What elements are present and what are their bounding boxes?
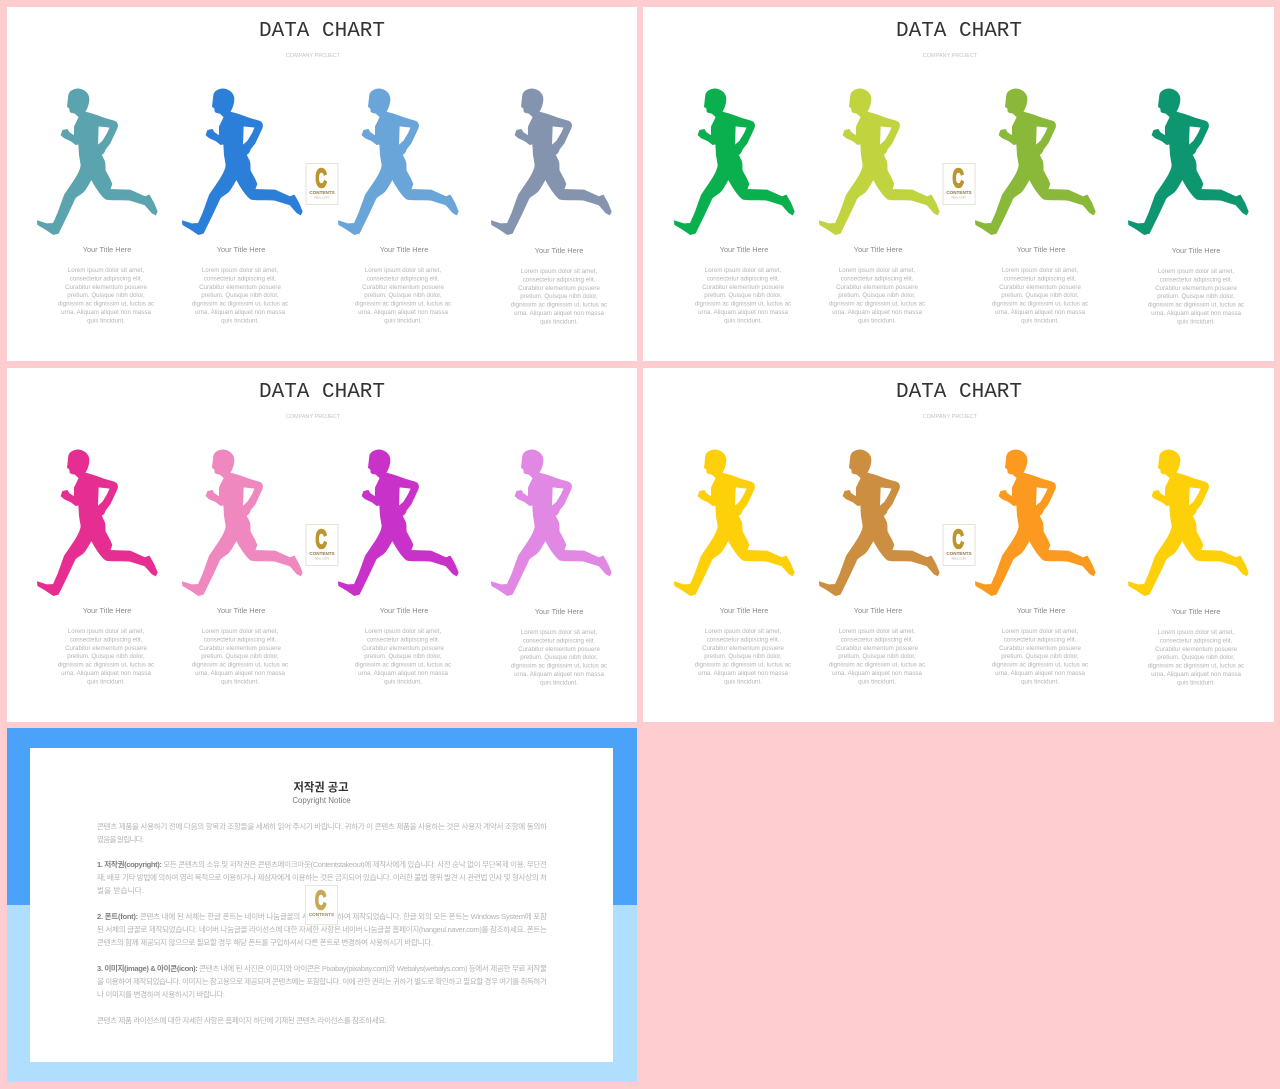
logo: REAL COPY: [952, 556, 967, 560]
column text 4: quis tincidunt.: [1177, 318, 1215, 325]
column text 4: pretium. Quisque nibh dolor,: [1157, 654, 1235, 661]
column text 4: urna. Aliquam aliquet non massa: [514, 310, 604, 317]
logo: REAL COPY: [315, 556, 330, 560]
column text 2: pretium. Quisque nibh dolor,: [201, 653, 279, 660]
column text 3: consectetur adipiscing elit.: [1004, 275, 1077, 282]
column text 1: consectetur adipiscing elit.: [707, 636, 780, 643]
column text 4: pretium. Quisque nibh dolor,: [520, 654, 598, 661]
column text 4: dignissim ac dignissim ut, luctus ac: [511, 302, 607, 309]
column text 2: dignissim ac dignissim ut, luctus ac: [829, 662, 925, 669]
column text 4: consectetur adipiscing elit.: [1160, 276, 1233, 283]
column text 3: Lorem ipsum dolor sit amet,: [365, 628, 441, 635]
column text 3: dignissim ac dignissim ut, luctus ac: [992, 301, 1088, 308]
column text 1: pretium. Quisque nibh dolor,: [704, 292, 782, 299]
logo: CONTENTS: [309, 190, 335, 195]
logo: [943, 524, 975, 566]
icon: runner 1: [37, 450, 157, 596]
logo: [306, 524, 338, 566]
logo: C: [316, 525, 327, 554]
notice heading: 저작권 공고: [293, 780, 349, 794]
column text 3: consectetur adipiscing elit.: [1004, 636, 1077, 643]
icon: runner 2: [819, 89, 939, 235]
icon: runner 2: [182, 450, 302, 596]
column text 1: Curabitur elementum posuere: [65, 284, 147, 291]
column text 1: pretium. Quisque nibh dolor,: [67, 653, 145, 660]
column text 4: consectetur adipiscing elit.: [1160, 637, 1233, 644]
title: DATA CHART: [259, 381, 385, 404]
column text 1: urna. Aliquam aliquet non massa: [61, 670, 151, 677]
column text 3: Lorem ipsum dolor sit amet,: [1002, 267, 1078, 274]
notice section 3: image and icon: 을 이용하여 제작되었습니다. 이미지는 참고용으로 제공되며 콘텐츠에는 포함합니다. 이에 관한 권리는 귀하가 별도로 확인하고 필요할 경우 여기를 취득하거: [97, 976, 547, 986]
column title 1: Your Title Here: [720, 606, 768, 615]
title: DATA CHART: [896, 381, 1022, 404]
column text 2: dignissim ac dignissim ut, luctus ac: [192, 301, 288, 308]
column title 3: Your Title Here: [380, 606, 428, 615]
column text 1: quis tincidunt.: [87, 317, 125, 324]
column text 3: urna. Aliquam aliquet non massa: [358, 670, 448, 677]
column text 4: consectetur adipiscing elit.: [523, 637, 596, 644]
panel: green data chart: [643, 7, 1274, 361]
column text 1: consectetur adipiscing elit.: [70, 636, 143, 643]
column title 3: Your Title Here: [1017, 245, 1065, 254]
column text 2: urna. Aliquam aliquet non massa: [195, 670, 285, 677]
icon: runner 3: [338, 89, 458, 235]
column text 3: consectetur adipiscing elit.: [367, 275, 440, 282]
logo: C: [952, 525, 964, 554]
notice section 1: copyright: [97, 859, 547, 895]
subtitle: COMPANY PROJECT: [286, 414, 341, 420]
column text 4: pretium. Quisque nibh dolor,: [520, 293, 598, 300]
logo: C: [315, 886, 326, 915]
column text 4: Lorem ipsum dolor sit amet,: [521, 268, 597, 275]
column text 2: consectetur adipiscing elit.: [841, 275, 914, 282]
column text 2: pretium. Quisque nibh dolor,: [201, 292, 279, 299]
panel: teal and blue data chart: [7, 7, 637, 361]
column text 3: quis tincidunt.: [384, 678, 422, 685]
notice section 1: copyright: 벌을 받습니다.: [97, 885, 144, 895]
subtitle: COMPANY PROJECT: [923, 53, 978, 59]
column text 2: Lorem ipsum dolor sit amet,: [839, 628, 915, 635]
column title 3: Your Title Here: [1017, 606, 1065, 615]
notice section 2: font: 2. 폰트(font): 콘텐츠 내에 된 서체는 한글 폰트는 네이버 나눔글꼴의 서체를 사용하여 제작되었습니다. 한글 외의 모든 폰트는 Windows System에 포함: [97, 911, 547, 921]
notice subheading: Copyright Notice: [292, 796, 351, 805]
logo: C: [952, 164, 964, 193]
panel: pink data chart: [7, 368, 637, 722]
column text 3: urna. Aliquam aliquet non massa: [995, 309, 1085, 316]
logo: C: [316, 164, 327, 193]
notice section 3: image and icon: 나 이미지를 변경하여 사용하시기 바랍니다.: [97, 989, 225, 999]
notice section 2: font: 된 서체의 글꼴로 제작되었습니다. 네이버 나눔글꼴 라이선스에 대한 자세한 사항은 네이버 나눔글꼴 홈페이지(hangeul.naver.com)를 참조하세요. 폰트는: [97, 924, 547, 934]
logo: [306, 164, 338, 204]
column text 3: Curabitur elementum posuere: [362, 645, 444, 652]
notice intro text: 콘텐츠 제품을 사용하기 전에 다음의 항목과 조항들을 세세히 읽어 주시기 바랍니다. 귀하가 이 콘텐츠 제품을 사용하는 것은 사용자 계약서 조항에 동의하: [97, 821, 547, 831]
column text 3: dignissim ac dignissim ut, luctus ac: [992, 662, 1088, 669]
column text 4: Curabitur elementum posuere: [518, 646, 600, 653]
column text 4: consectetur adipiscing elit.: [523, 276, 596, 283]
column text 3: pretium. Quisque nibh dolor,: [1001, 653, 1079, 660]
column text 4: pretium. Quisque nibh dolor,: [1157, 293, 1235, 300]
column text 3: urna. Aliquam aliquet non massa: [358, 309, 448, 316]
icon: runner 1: [37, 89, 157, 235]
column text 4: Lorem ipsum dolor sit amet,: [1158, 629, 1234, 636]
logo: [943, 164, 975, 204]
icon: runner 1: [674, 89, 794, 235]
column text 1: Lorem ipsum dolor sit amet,: [68, 267, 144, 274]
column title 2: Your Title Here: [217, 245, 265, 254]
column text 1: pretium. Quisque nibh dolor,: [67, 292, 145, 299]
column text 2: quis tincidunt.: [858, 678, 896, 685]
column text 1: urna. Aliquam aliquet non massa: [698, 309, 788, 316]
column text 4: Lorem ipsum dolor sit amet,: [1158, 268, 1234, 275]
column text 3: pretium. Quisque nibh dolor,: [364, 292, 442, 299]
column text 4: urna. Aliquam aliquet non massa: [514, 671, 604, 678]
column text 1: Lorem ipsum dolor sit amet,: [68, 628, 144, 635]
column text 3: Curabitur elementum posuere: [999, 284, 1081, 291]
column text 1: urna. Aliquam aliquet non massa: [698, 670, 788, 677]
column title 1: Your Title Here: [83, 245, 131, 254]
column text 3: quis tincidunt.: [1021, 317, 1059, 324]
column text 1: consectetur adipiscing elit.: [70, 275, 143, 282]
column text 3: Lorem ipsum dolor sit amet,: [1002, 628, 1078, 635]
column text 3: urna. Aliquam aliquet non massa: [995, 670, 1085, 677]
icon: runner 4: [491, 89, 611, 235]
column text 1: urna. Aliquam aliquet non massa: [61, 309, 151, 316]
icon: runner 2: [182, 89, 302, 235]
column text 2: Curabitur elementum posuere: [836, 645, 918, 652]
column text 2: urna. Aliquam aliquet non massa: [832, 309, 922, 316]
column text 2: Curabitur elementum posuere: [199, 645, 281, 652]
column text 3: Lorem ipsum dolor sit amet,: [365, 267, 441, 274]
icon: runner 4: [1128, 89, 1248, 235]
column text 2: urna. Aliquam aliquet non massa: [832, 670, 922, 677]
column text 3: pretium. Quisque nibh dolor,: [1001, 292, 1079, 299]
column text 1: dignissim ac dignissim ut, luctus ac: [58, 301, 154, 308]
icon: runner 1: [674, 450, 794, 596]
logo: CONTENTS: [946, 190, 972, 195]
notice closing text: 콘텐츠 제품 라이선스에 대한 자세한 사항은 홈페이지 하단에 기재된 콘텐츠 라이선스를 참조하세요.: [97, 1015, 387, 1025]
notice section 1: copyright: 재, 배포 기타 방법에 의하여 영리 목적으로 이용하거나 제삼자에게 이용하는 것은 금지되어 있습니다. 이러한 불법 행위 발견 시 관련법 민사 및 형사상의 처: [97, 872, 547, 882]
title: DATA CHART: [259, 20, 385, 43]
notice section 2: font: [97, 911, 547, 947]
column title 3: Your Title Here: [380, 245, 428, 254]
column text 2: consectetur adipiscing elit.: [841, 636, 914, 643]
logo: REAL COPY: [315, 196, 330, 200]
icon: runner 3: [975, 89, 1095, 235]
column text 3: Curabitur elementum posuere: [999, 645, 1081, 652]
column text 3: Curabitur elementum posuere: [362, 284, 444, 291]
column text 4: urna. Aliquam aliquet non massa: [1151, 310, 1241, 317]
column text 2: urna. Aliquam aliquet non massa: [195, 309, 285, 316]
column title 4: Your Title Here: [535, 607, 583, 616]
column text 1: quis tincidunt.: [87, 678, 125, 685]
column text 4: quis tincidunt.: [1177, 679, 1215, 686]
column text 2: dignissim ac dignissim ut, luctus ac: [192, 662, 288, 669]
column text 4: urna. Aliquam aliquet non massa: [1151, 671, 1241, 678]
column text 2: quis tincidunt.: [858, 317, 896, 324]
column text 4: quis tincidunt.: [540, 318, 578, 325]
column text 3: consectetur adipiscing elit.: [367, 636, 440, 643]
column text 2: pretium. Quisque nibh dolor,: [838, 653, 916, 660]
subtitle: COMPANY PROJECT: [286, 53, 341, 59]
notice section 3: image and icon: [97, 963, 547, 999]
icon: runner 4: [1128, 450, 1248, 596]
title: DATA CHART: [896, 20, 1022, 43]
column text 3: quis tincidunt.: [1021, 678, 1059, 685]
column text 4: dignissim ac dignissim ut, luctus ac: [511, 663, 607, 670]
column text 4: Curabitur elementum posuere: [1155, 646, 1237, 653]
column title 4: Your Title Here: [535, 246, 583, 255]
column text 2: pretium. Quisque nibh dolor,: [838, 292, 916, 299]
column text 2: dignissim ac dignissim ut, luctus ac: [829, 301, 925, 308]
column text 3: dignissim ac dignissim ut, luctus ac: [355, 301, 451, 308]
column title 1: Your Title Here: [83, 606, 131, 615]
panel: copyright notice: [7, 728, 637, 1082]
column text 1: quis tincidunt.: [724, 317, 762, 324]
column text 2: Curabitur elementum posuere: [836, 284, 918, 291]
logo: CONTENTS: [309, 912, 334, 917]
column text 2: Lorem ipsum dolor sit amet,: [202, 628, 278, 635]
column text 4: dignissim ac dignissim ut, luctus ac: [1148, 302, 1244, 309]
column text 4: Curabitur elementum posuere: [1155, 285, 1237, 292]
column title 4: Your Title Here: [1172, 246, 1220, 255]
column text 3: quis tincidunt.: [384, 317, 422, 324]
column text 1: Lorem ipsum dolor sit amet,: [705, 628, 781, 635]
column text 4: dignissim ac dignissim ut, luctus ac: [1148, 663, 1244, 670]
column title 2: Your Title Here: [217, 606, 265, 615]
notice intro text: [97, 821, 547, 844]
column title 2: Your Title Here: [854, 606, 902, 615]
icon: runner 3: [338, 450, 458, 596]
column title 1: Your Title Here: [720, 245, 768, 254]
icon: runner 3: [975, 450, 1095, 596]
notice intro text: 였음을 알립니다.: [97, 834, 144, 844]
column text 2: consectetur adipiscing elit.: [204, 636, 277, 643]
column text 1: Curabitur elementum posuere: [702, 645, 784, 652]
notice section 2: font: 콘텐츠의 함께 제공되지 않으므로 필요할 경우 해당 폰트를 구입하셔서 다른 폰트로 변경하여 사용하시기 바랍니다.: [97, 937, 433, 947]
logo: CONTENTS: [309, 551, 335, 556]
column text 1: Curabitur elementum posuere: [702, 284, 784, 291]
column text 1: quis tincidunt.: [724, 678, 762, 685]
column text 2: quis tincidunt.: [221, 678, 259, 685]
notice section 3: image and icon: 3. 이미지(image) & 아이콘(icon): 콘텐츠 내에 된 사진은 이미지와 아이콘은 Pixabay(pixabay.com)와 Webalys(webalys.com) 등에서 제공한 무료 저작물: [97, 963, 547, 973]
column text 2: consectetur adipiscing elit.: [204, 275, 277, 282]
column text 1: dignissim ac dignissim ut, luctus ac: [695, 662, 791, 669]
column text 2: quis tincidunt.: [221, 317, 259, 324]
icon: runner 4: [491, 450, 611, 596]
column text 1: Lorem ipsum dolor sit amet,: [705, 267, 781, 274]
column text 2: Curabitur elementum posuere: [199, 284, 281, 291]
column text 4: Lorem ipsum dolor sit amet,: [521, 629, 597, 636]
column text 3: dignissim ac dignissim ut, luctus ac: [355, 662, 451, 669]
panel: yellow and orange data chart: [643, 368, 1274, 722]
column text 4: quis tincidunt.: [540, 679, 578, 686]
column text 1: dignissim ac dignissim ut, luctus ac: [695, 301, 791, 308]
column text 2: Lorem ipsum dolor sit amet,: [839, 267, 915, 274]
logo: [306, 886, 338, 924]
subtitle: COMPANY PROJECT: [923, 414, 978, 420]
column text 1: dignissim ac dignissim ut, luctus ac: [58, 662, 154, 669]
column text 3: pretium. Quisque nibh dolor,: [364, 653, 442, 660]
column text 1: pretium. Quisque nibh dolor,: [704, 653, 782, 660]
logo: CONTENTS: [946, 551, 972, 556]
column text 4: Curabitur elementum posuere: [518, 285, 600, 292]
notice section 1: copyright: 1. 저작권(copyright): 모든 콘텐츠의 소유 및 저작권은 콘텐츠메이크아웃(Contentstakeout)에 제작사에게 있습니다. 사전 승낙 없이 무단복제 이용, 무단전: [97, 859, 547, 869]
column title 4: Your Title Here: [1172, 607, 1220, 616]
logo: REAL COPY: [952, 196, 967, 200]
icon: runner 2: [819, 450, 939, 596]
column title 2: Your Title Here: [854, 245, 902, 254]
column text 1: consectetur adipiscing elit.: [707, 275, 780, 282]
column text 2: Lorem ipsum dolor sit amet,: [202, 267, 278, 274]
column text 1: Curabitur elementum posuere: [65, 645, 147, 652]
